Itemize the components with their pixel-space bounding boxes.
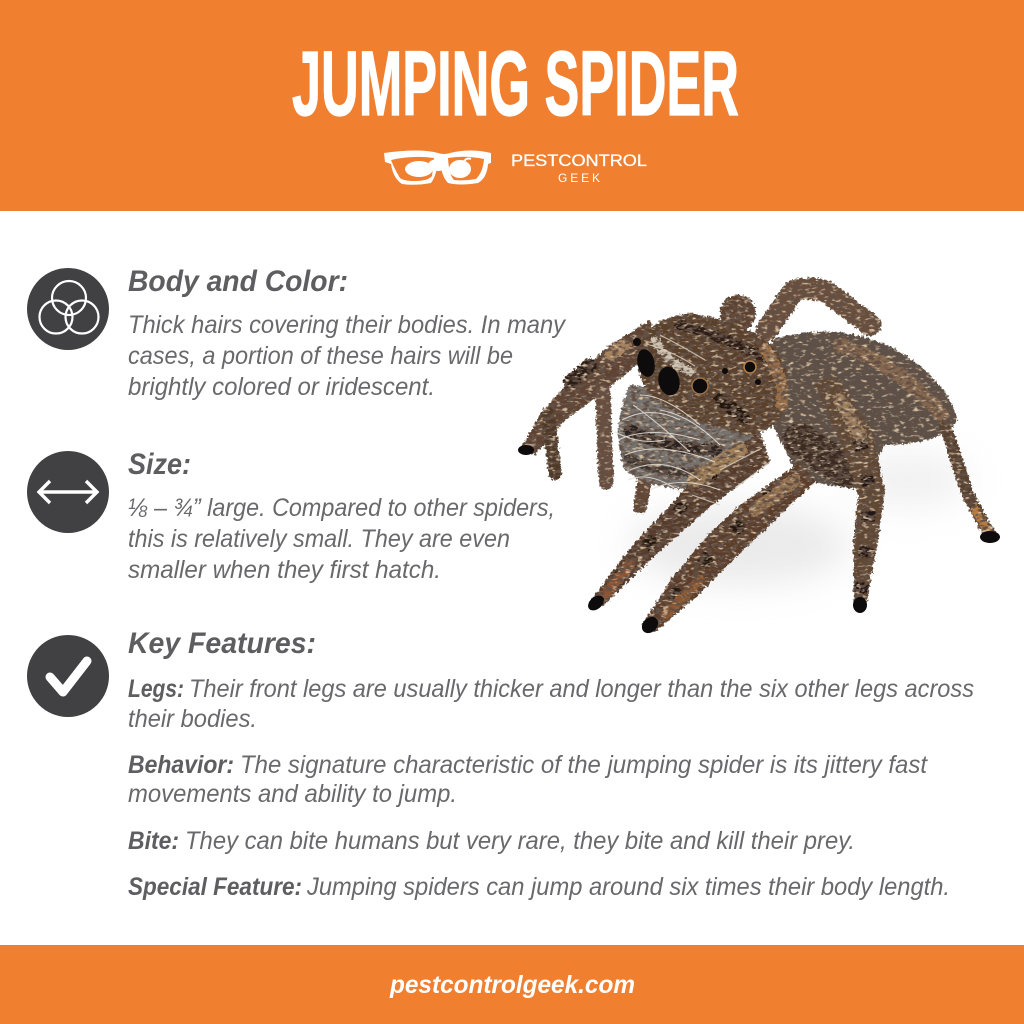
section: size (27, 448, 555, 584)
right legs (945, 425, 990, 535)
text: behavior: movements and ability to jump. (128, 780, 457, 808)
icon: overlapping circles (27, 268, 109, 350)
text: size: ⅛ – ¾” large. Compared to other spiders, (128, 494, 555, 522)
icon: check mark (27, 635, 109, 717)
spider hairs (615, 335, 770, 505)
abdomen (770, 332, 957, 490)
text: behavior: Behavior: (128, 751, 234, 779)
icon: double arrow (27, 451, 109, 533)
logo: Pest Control Geek (384, 150, 647, 185)
head (637, 313, 788, 434)
text: legs: Their front legs are usually thicker and longer than the six other legs across (189, 675, 974, 703)
text: body and color: Thick hairs covering their bodies. In many (128, 311, 566, 339)
logo wordmark: PESTCONTROL (511, 151, 647, 170)
front legs (590, 432, 770, 606)
footer url: pestcontrolgeek.com (389, 971, 635, 999)
text: special feature: Special Feature: (128, 873, 302, 901)
spider shadow (630, 452, 970, 585)
left legs (520, 320, 655, 455)
text: legs: Legs: (128, 675, 184, 703)
logo: Pest Control Geek: GEEK (558, 171, 600, 185)
text: behavior: The signature characteristic of the jumping spider is its jittery fast (240, 751, 928, 779)
icon: glasses with ant (384, 150, 491, 185)
heading: key features: Key Features: (128, 627, 316, 660)
footer band (0, 945, 1024, 1024)
text: special feature: Jumping spiders can jump around six times their body length. (306, 873, 950, 901)
back legs (767, 288, 870, 330)
spider leg tips (518, 445, 534, 455)
text: behavior (128, 751, 928, 808)
white hair under head (619, 385, 760, 489)
header band (0, 0, 1024, 211)
spider eyes (518, 338, 1000, 636)
text: size (128, 494, 555, 584)
text: body and color: cases, a portion of these hairs will be (128, 342, 513, 370)
text: body and color (128, 311, 566, 401)
text: legs: their bodies. (128, 705, 257, 733)
text: size: this is relatively small. They are even (128, 525, 510, 553)
text: body and color: brightly colored or iridescent. (128, 373, 435, 401)
spider body and legs (520, 288, 990, 632)
text: bite: Bite: (128, 827, 179, 855)
text: legs (128, 675, 974, 733)
section: body and color (27, 265, 566, 401)
heading: body and color: Body and Color: (128, 265, 348, 298)
panel: spider photo (518, 288, 1000, 636)
text: bite: They can bite humans but very rare, they bite and kill their prey. (185, 827, 855, 855)
heading: size: Size: (128, 448, 191, 481)
section: key features (27, 627, 974, 901)
text: size: smaller when they first hatch. (128, 556, 441, 584)
